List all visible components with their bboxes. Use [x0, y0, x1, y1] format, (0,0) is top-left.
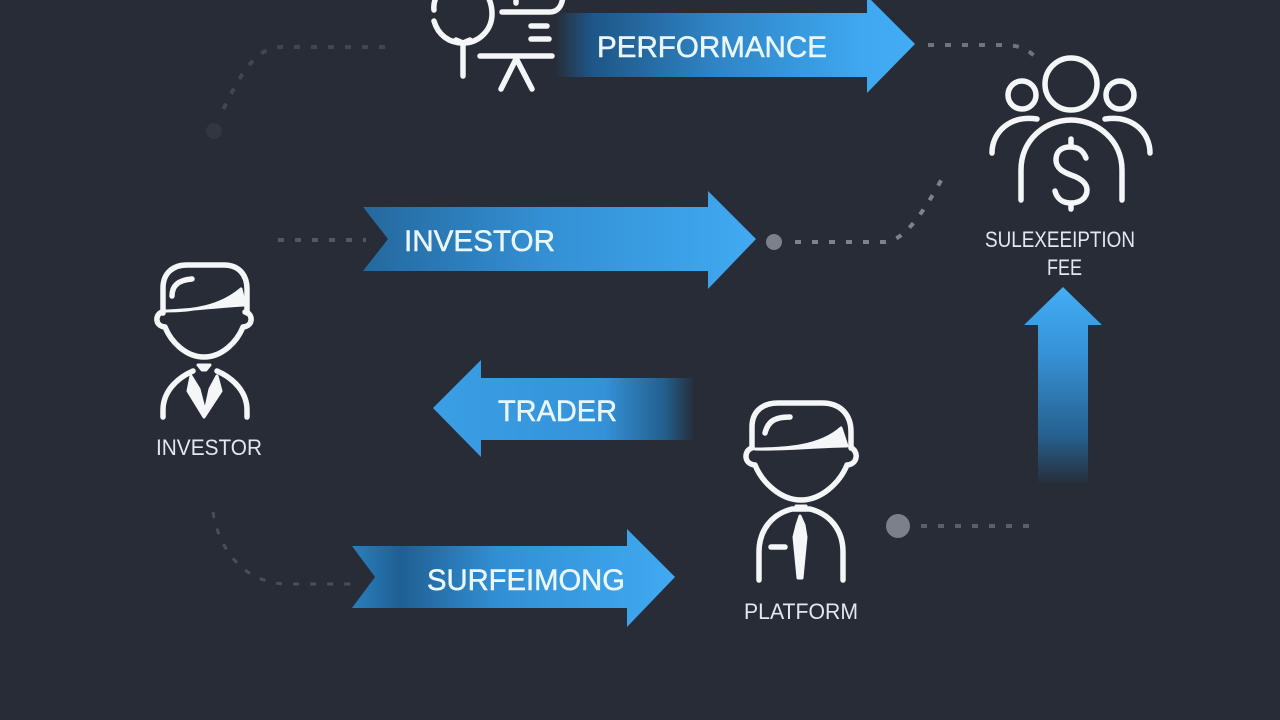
- label: investor arrow: INVESTOR: [404, 225, 555, 258]
- label: trader: TRADER: [498, 395, 617, 428]
- dotted connector: platform to up arrow: [886, 514, 1040, 538]
- arrow: surfeimong: [352, 529, 675, 627]
- label: platform: PLATFORM: [744, 599, 858, 624]
- dotted connector: top left: [206, 47, 385, 139]
- dotted connector: performance to subscribers: [928, 45, 1040, 62]
- arrow: investor: [363, 191, 756, 289]
- dotted connector: lower left: [213, 512, 352, 584]
- icon: platform person: [746, 403, 856, 580]
- label: performance: PERFORMANCE: [597, 31, 827, 64]
- label: subscription fee: SULEXEEIPTION: [985, 227, 1135, 252]
- icon: presenter at board: [434, 0, 563, 89]
- label: subscription fee: FEE: [1047, 255, 1082, 280]
- label: subscription fee: [985, 227, 1135, 280]
- label: surfeimong: SURFEIMONG: [427, 564, 625, 597]
- icon: investor person: [157, 265, 251, 417]
- icon: dollar sign: [1055, 139, 1087, 209]
- dotted connector: investor arrow to subscribers: [766, 175, 944, 250]
- dotted connector: investor arrow left: [278, 238, 366, 242]
- arrow: trader: [433, 360, 695, 457]
- label: investor: INVESTOR: [156, 435, 262, 460]
- icon: subscribers with dollar: [992, 58, 1150, 209]
- arrow: up: [1024, 287, 1102, 485]
- arrow: performance: [555, 0, 915, 93]
